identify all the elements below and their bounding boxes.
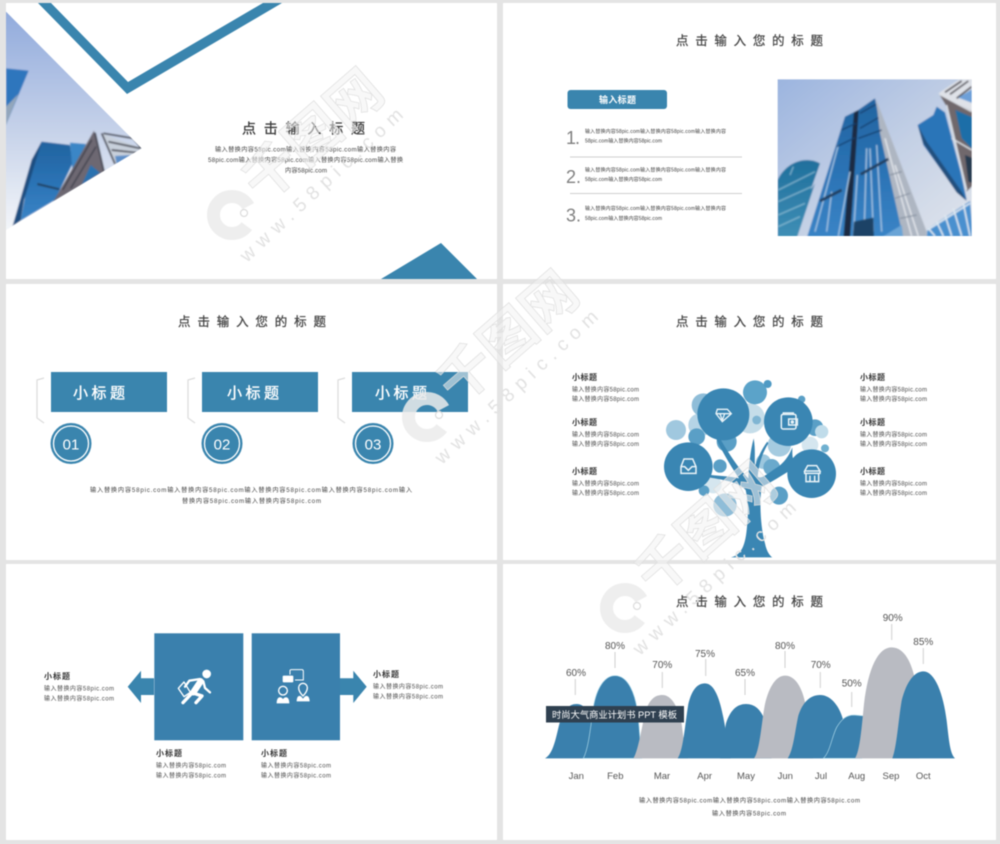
watermark 1: www.58pic.com [235,105,408,267]
bottom-right blue triangle [381,243,477,279]
slide 2: numbered list with photo [503,3,996,279]
percentage labels: 50% [842,678,862,690]
left arrow [128,671,154,703]
right label 1: 输入替换内容58pic.com [860,386,927,394]
large circles [697,388,749,440]
left label [44,671,114,702]
icon: two people with speech bubbles [277,670,310,703]
card 01 [37,372,167,464]
card 03: 小标题 [375,385,427,402]
list item 1: 1. [566,128,580,148]
slide 6: monthly hill chart [503,564,996,840]
month labels: Feb [607,771,623,782]
month labels: Mar [654,771,670,782]
hill: May [720,704,772,758]
list item 2: 2. [566,167,581,187]
bottom-left label: 输入替换内容58pic.com [156,762,226,770]
tooltip banner: 时尚大气商业计划书 PPT 模板 [552,709,677,720]
right label 2: 输入替换内容58pic.com [860,430,927,438]
right label 2: 输入替换内容58pic.com [860,440,927,448]
icon: storefront [805,466,820,482]
slide 3 body text: 输入替换内容58pic.com输入替换内容58pic.com输入替换内容58pic.com输入替换内容58pic.com输入 [90,486,412,494]
triangular building photo [3,7,147,233]
slide 3 title: 点击输入您的标题 [178,314,326,329]
percentage labels: 85% [913,637,933,648]
month labels: Oct [916,771,931,782]
watermark 1 [206,58,408,267]
right label: 输入替换内容58pic.com [373,682,443,690]
left square with runner icon [154,633,243,740]
hill: Sep [855,647,920,758]
right label 3 [860,466,927,497]
cover body text: 58pic.com输入替换内容58pic.com输入替换内容58pic.com输入替换 [208,156,403,164]
list item 3 [566,205,726,226]
right square with people icon [252,633,340,740]
bottom-left label: 输入替换内容58pic.com [156,772,226,780]
month labels: Apr [697,771,712,782]
watermark 2: 千图网 [425,260,590,415]
watermark 3: www.58pic.com [628,498,801,660]
hill: Jun [754,676,813,758]
cover body text: 输入替换内容58pic.com输入替换内容58pic.com输入替换内容 [215,146,396,154]
right arrow [340,671,367,703]
header button [568,90,667,109]
hill: Jul [788,695,848,758]
card 01: 小标题 [73,385,125,402]
watermark 2 [401,260,603,469]
watermark 3: 千图网 [623,451,788,606]
tree trunk and branches [705,429,802,557]
slide 6 title: 点击输入您的标题 [676,594,823,609]
left label 3 [572,466,639,497]
list item 2: 58pic.com输入替换内容58pic.com [585,176,662,183]
left label 2: 输入替换内容58pic.com [572,430,639,438]
hill: Feb [583,676,642,758]
month labels: May [737,771,755,782]
left label 2: 输入替换内容58pic.com [572,440,639,448]
left label 1: 输入替换内容58pic.com [572,395,639,403]
left label 1: 输入替换内容58pic.com [572,386,639,394]
card 02 [188,372,318,464]
hill: Oct [892,671,955,758]
right label 1: 输入替换内容58pic.com [860,395,927,403]
slide 2 title: 点击输入您的标题 [676,33,823,48]
percentage labels: 60% [566,668,586,679]
percentage labels: 80% [605,641,625,652]
slide 5: two squares with arrows [6,564,497,840]
percentage labels: 70% [652,660,672,671]
list item 3: 输入替换内容58pic.com输入替换内容58pic.com输入替换内容 [585,205,726,212]
right label 2 [860,417,927,448]
left label 3: 小标题 [572,466,597,476]
bottom-right label: 小标题 [261,748,287,758]
bottom-left label [156,748,226,780]
percentage labels [566,613,933,690]
month labels: Jan [569,771,584,782]
tree illustration [664,380,836,557]
icon: wallet [781,413,797,429]
slide 4: tree diagram [503,284,996,560]
slide 6 body text: 输入替换内容58pic.com输入替换内容58pic.com输入替换内容58pic.com [639,796,860,804]
slide 3 body text [90,486,412,505]
right label 2: 小标题 [860,417,885,427]
watermark 1: 千图网 [230,58,395,213]
month labels: Jun [778,771,793,782]
left label: 输入替换内容58pic.com [44,684,114,692]
card 03 [338,372,468,464]
cover title: 点击输入标题 [242,120,365,136]
left label 3: 输入替换内容58pic.com [572,480,639,488]
card 02: 小标题 [227,385,279,402]
slide 3: three sub-heading cards [6,284,497,560]
hill: Mar [633,695,688,758]
header button: 输入标题 [599,94,636,105]
month labels: Sep [883,771,899,782]
list item 1: 58pic.com输入替换内容58pic.com [585,138,662,144]
blue chevron line [38,3,282,94]
list item 1: 输入替换内容58pic.com输入替换内容58pic.com输入替换内容 [585,128,726,135]
right label [373,669,443,700]
list item 1 [566,128,726,148]
icon: inbox tray [681,459,696,473]
slide 3 body text: 替换内容58pic.com输入替换内容58pic.com [182,497,321,505]
left label 2 [572,417,639,448]
hill: Aug [823,715,865,758]
leader lines [575,624,923,707]
hill: Jan [545,704,597,758]
right label 3: 输入替换内容58pic.com [860,489,927,497]
icon: running businessman [178,670,211,703]
left label 1: 小标题 [572,372,597,382]
bottom-left label: 小标题 [156,748,182,758]
cover body text: 内容58pic.com [285,166,327,174]
slide 6 body text: 输入替换内容58pic.com [712,810,786,818]
list item 2 [566,166,726,187]
tooltip banner [546,706,684,722]
list item 3: 3. [566,206,581,226]
right label 3: 小标题 [860,466,885,476]
percentage labels: 80% [775,641,795,652]
month labels [569,771,931,782]
right label 3: 输入替换内容58pic.com [860,480,927,488]
icon: diamond [716,409,731,422]
right label 1 [860,372,927,403]
hill: Apr [678,683,731,758]
left label 2: 小标题 [572,417,597,427]
bottom-right label: 输入替换内容58pic.com [261,762,331,770]
watermark 2: www.58pic.com [430,307,603,469]
month labels: Aug [848,771,865,782]
slide 6 body text [639,796,860,818]
cover body text [208,146,403,174]
hill chart [545,647,955,758]
card 01: 01 [63,436,79,454]
list item 2: 输入替换内容58pic.com输入替换内容58pic.com输入替换内容 [585,166,726,174]
percentage labels: 75% [695,649,715,660]
bottom-right label [261,748,331,780]
month labels: Jul [815,771,827,782]
left label: 输入替换内容58pic.com [44,694,114,702]
skyscraper photo [773,75,977,240]
bottom-right label: 输入替换内容58pic.com [261,772,331,780]
left label: 小标题 [44,671,70,681]
right label 1: 小标题 [860,372,885,382]
left label 1 [572,372,639,403]
right label: 输入替换内容58pic.com [373,692,443,700]
left label 3: 输入替换内容58pic.com [572,489,639,497]
percentage labels: 70% [811,660,831,671]
right label: 小标题 [373,669,399,679]
watermark 3 [599,451,801,660]
percentage labels: 90% [883,613,903,624]
list item 3: 58pic.com输入替换内容58pic.com [585,215,662,222]
card 03: 03 [365,436,381,454]
slide 1: cover [3,3,497,279]
percentage labels: 65% [735,668,755,679]
slide 4 title: 点击输入您的标题 [676,314,823,329]
card 02: 02 [214,436,230,454]
